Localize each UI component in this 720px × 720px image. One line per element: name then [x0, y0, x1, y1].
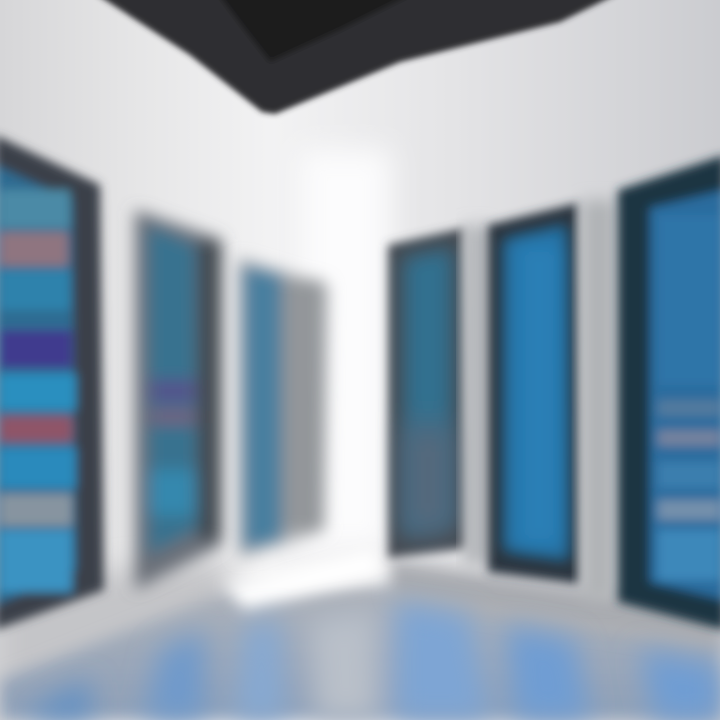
rack: third left	[238, 258, 328, 558]
left wall	[0, 0, 280, 720]
rack: far left	[0, 135, 104, 630]
floor	[0, 548, 720, 720]
left wall lower shading	[0, 560, 230, 700]
rack: right one	[388, 228, 467, 558]
pillar between right racks	[582, 200, 616, 600]
pillar between right racks	[464, 225, 490, 565]
rack: right two	[488, 203, 580, 584]
rack: second left	[135, 210, 222, 590]
right wall	[275, 0, 720, 720]
rack: far right	[618, 155, 720, 630]
blue floor reflections	[30, 600, 720, 720]
ceiling	[90, 0, 625, 114]
bright floor reflection	[225, 548, 385, 610]
right wall base shading	[390, 560, 720, 650]
bright wall highlight	[300, 150, 390, 550]
screen bands	[0, 190, 76, 592]
